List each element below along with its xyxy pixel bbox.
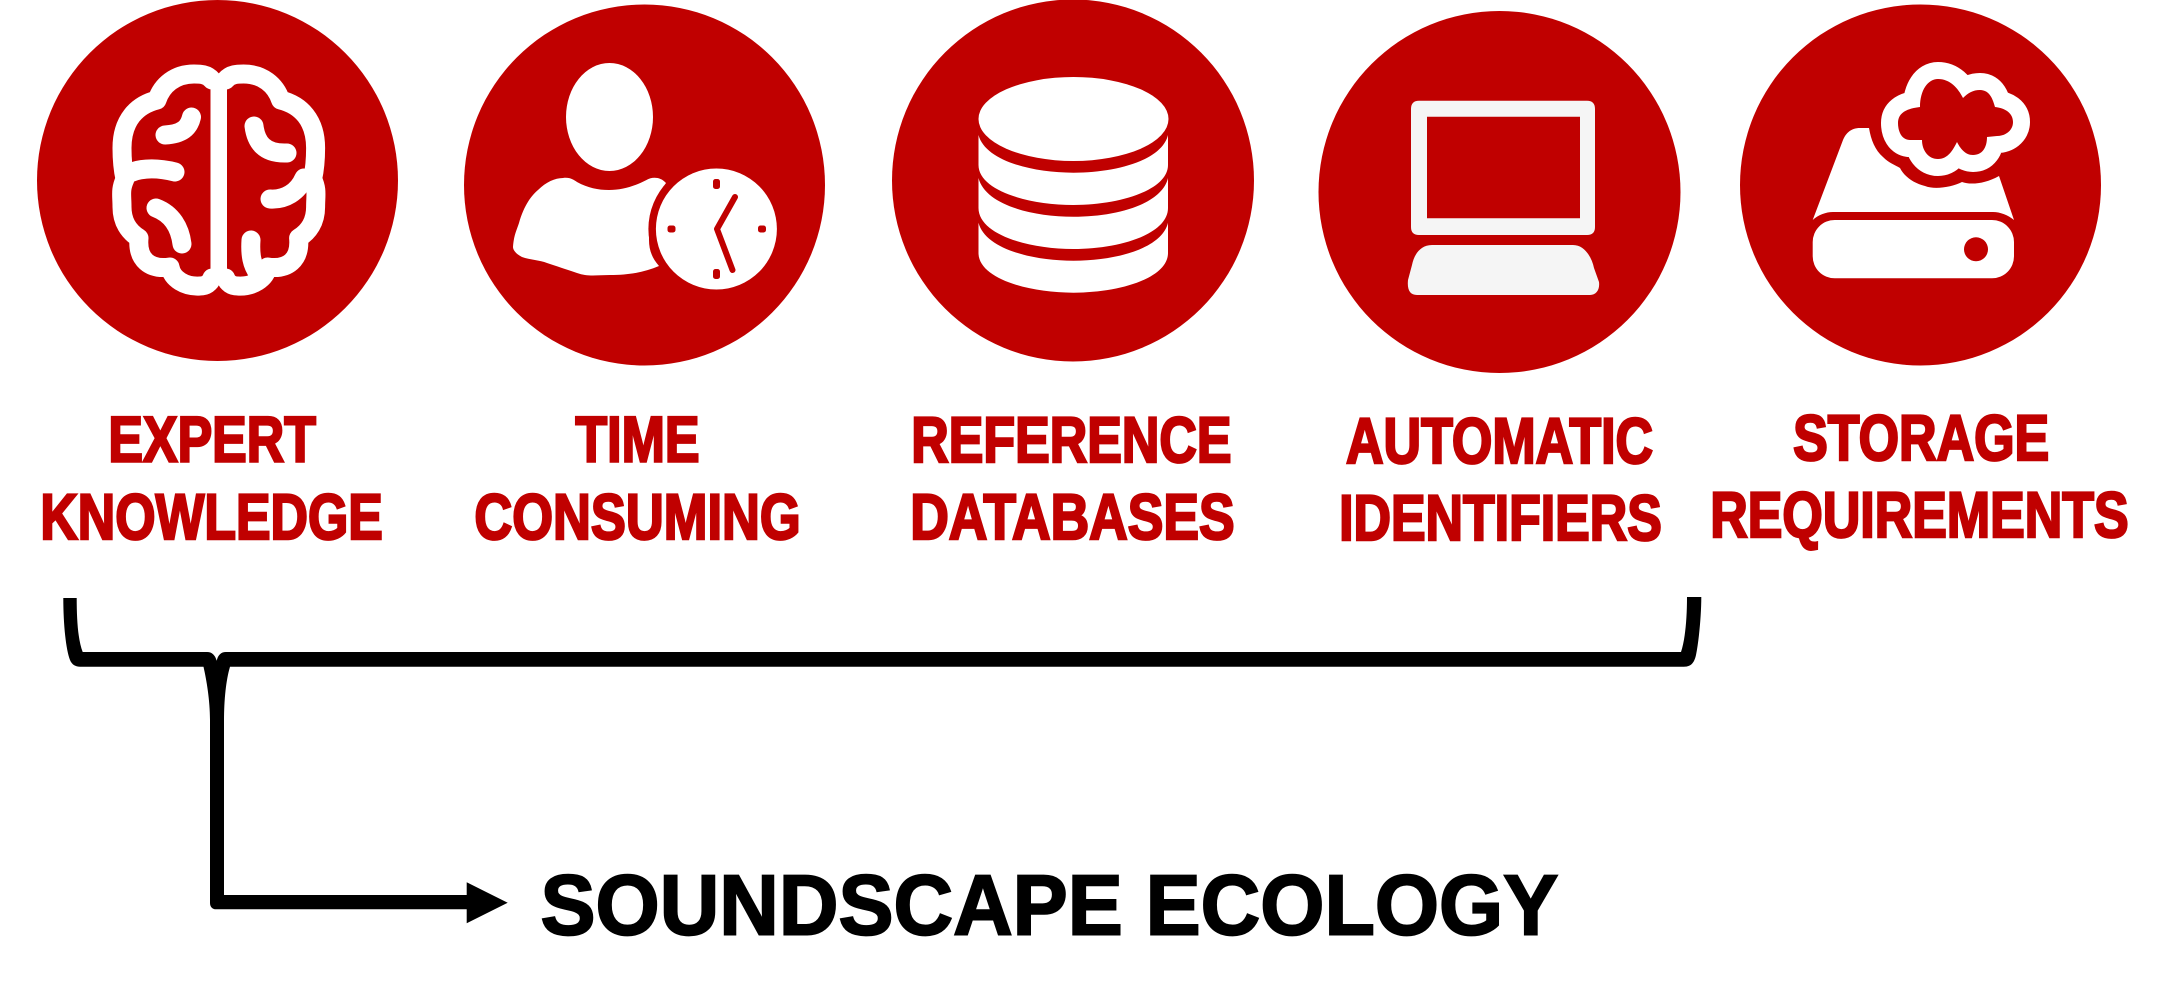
- icon: computer monitor and keyboard: [1408, 101, 1599, 295]
- bracket and arrow: [63, 597, 1701, 923]
- label: time consuming: [474, 404, 801, 553]
- label: expert knowledge: EXPERT: [108, 404, 316, 476]
- label: automatic identifiers: [1339, 405, 1662, 554]
- label: automatic identifiers: IDENTIFIERS: [1339, 482, 1662, 554]
- icon background circle: [892, 0, 1254, 362]
- label: storage requirements: REQUIREMENTS: [1710, 479, 2129, 551]
- label: storage requirements: STORAGE: [1793, 402, 2049, 474]
- icon: database cylinder: [978, 77, 1168, 293]
- icon: brain: [122, 74, 316, 286]
- panel: time consuming icon: [464, 4, 825, 366]
- label: expert knowledge: [40, 404, 383, 553]
- label: reference databases: REFERENCE: [911, 404, 1232, 476]
- icon: cloud hard drive: [1813, 79, 2014, 278]
- label: automatic identifiers: AUTOMATIC: [1346, 405, 1653, 477]
- label: time consuming: TIME: [575, 404, 700, 476]
- label: expert knowledge: KNOWLEDGE: [40, 481, 383, 553]
- icon: person with clock: [513, 63, 784, 297]
- panel: reference databases icon: [892, 0, 1254, 362]
- panel: automatic identifiers icon: [1318, 11, 1680, 373]
- icon background circle: [1318, 11, 1680, 373]
- icon background circle: [1740, 4, 2101, 366]
- label: storage requirements: [1710, 402, 2129, 551]
- label: reference databases: [910, 404, 1235, 553]
- icon background circle: [464, 4, 825, 366]
- label: time consuming: CONSUMING: [474, 481, 801, 553]
- panel: storage requirements icon: [1740, 4, 2101, 366]
- label: reference databases: DATABASES: [910, 481, 1235, 553]
- heading: soundscape ecology: SOUNDSCAPE ECOLOGY: [540, 858, 1558, 953]
- icon background circle: [37, 0, 398, 361]
- panel: expert knowledge icon: [37, 0, 398, 361]
